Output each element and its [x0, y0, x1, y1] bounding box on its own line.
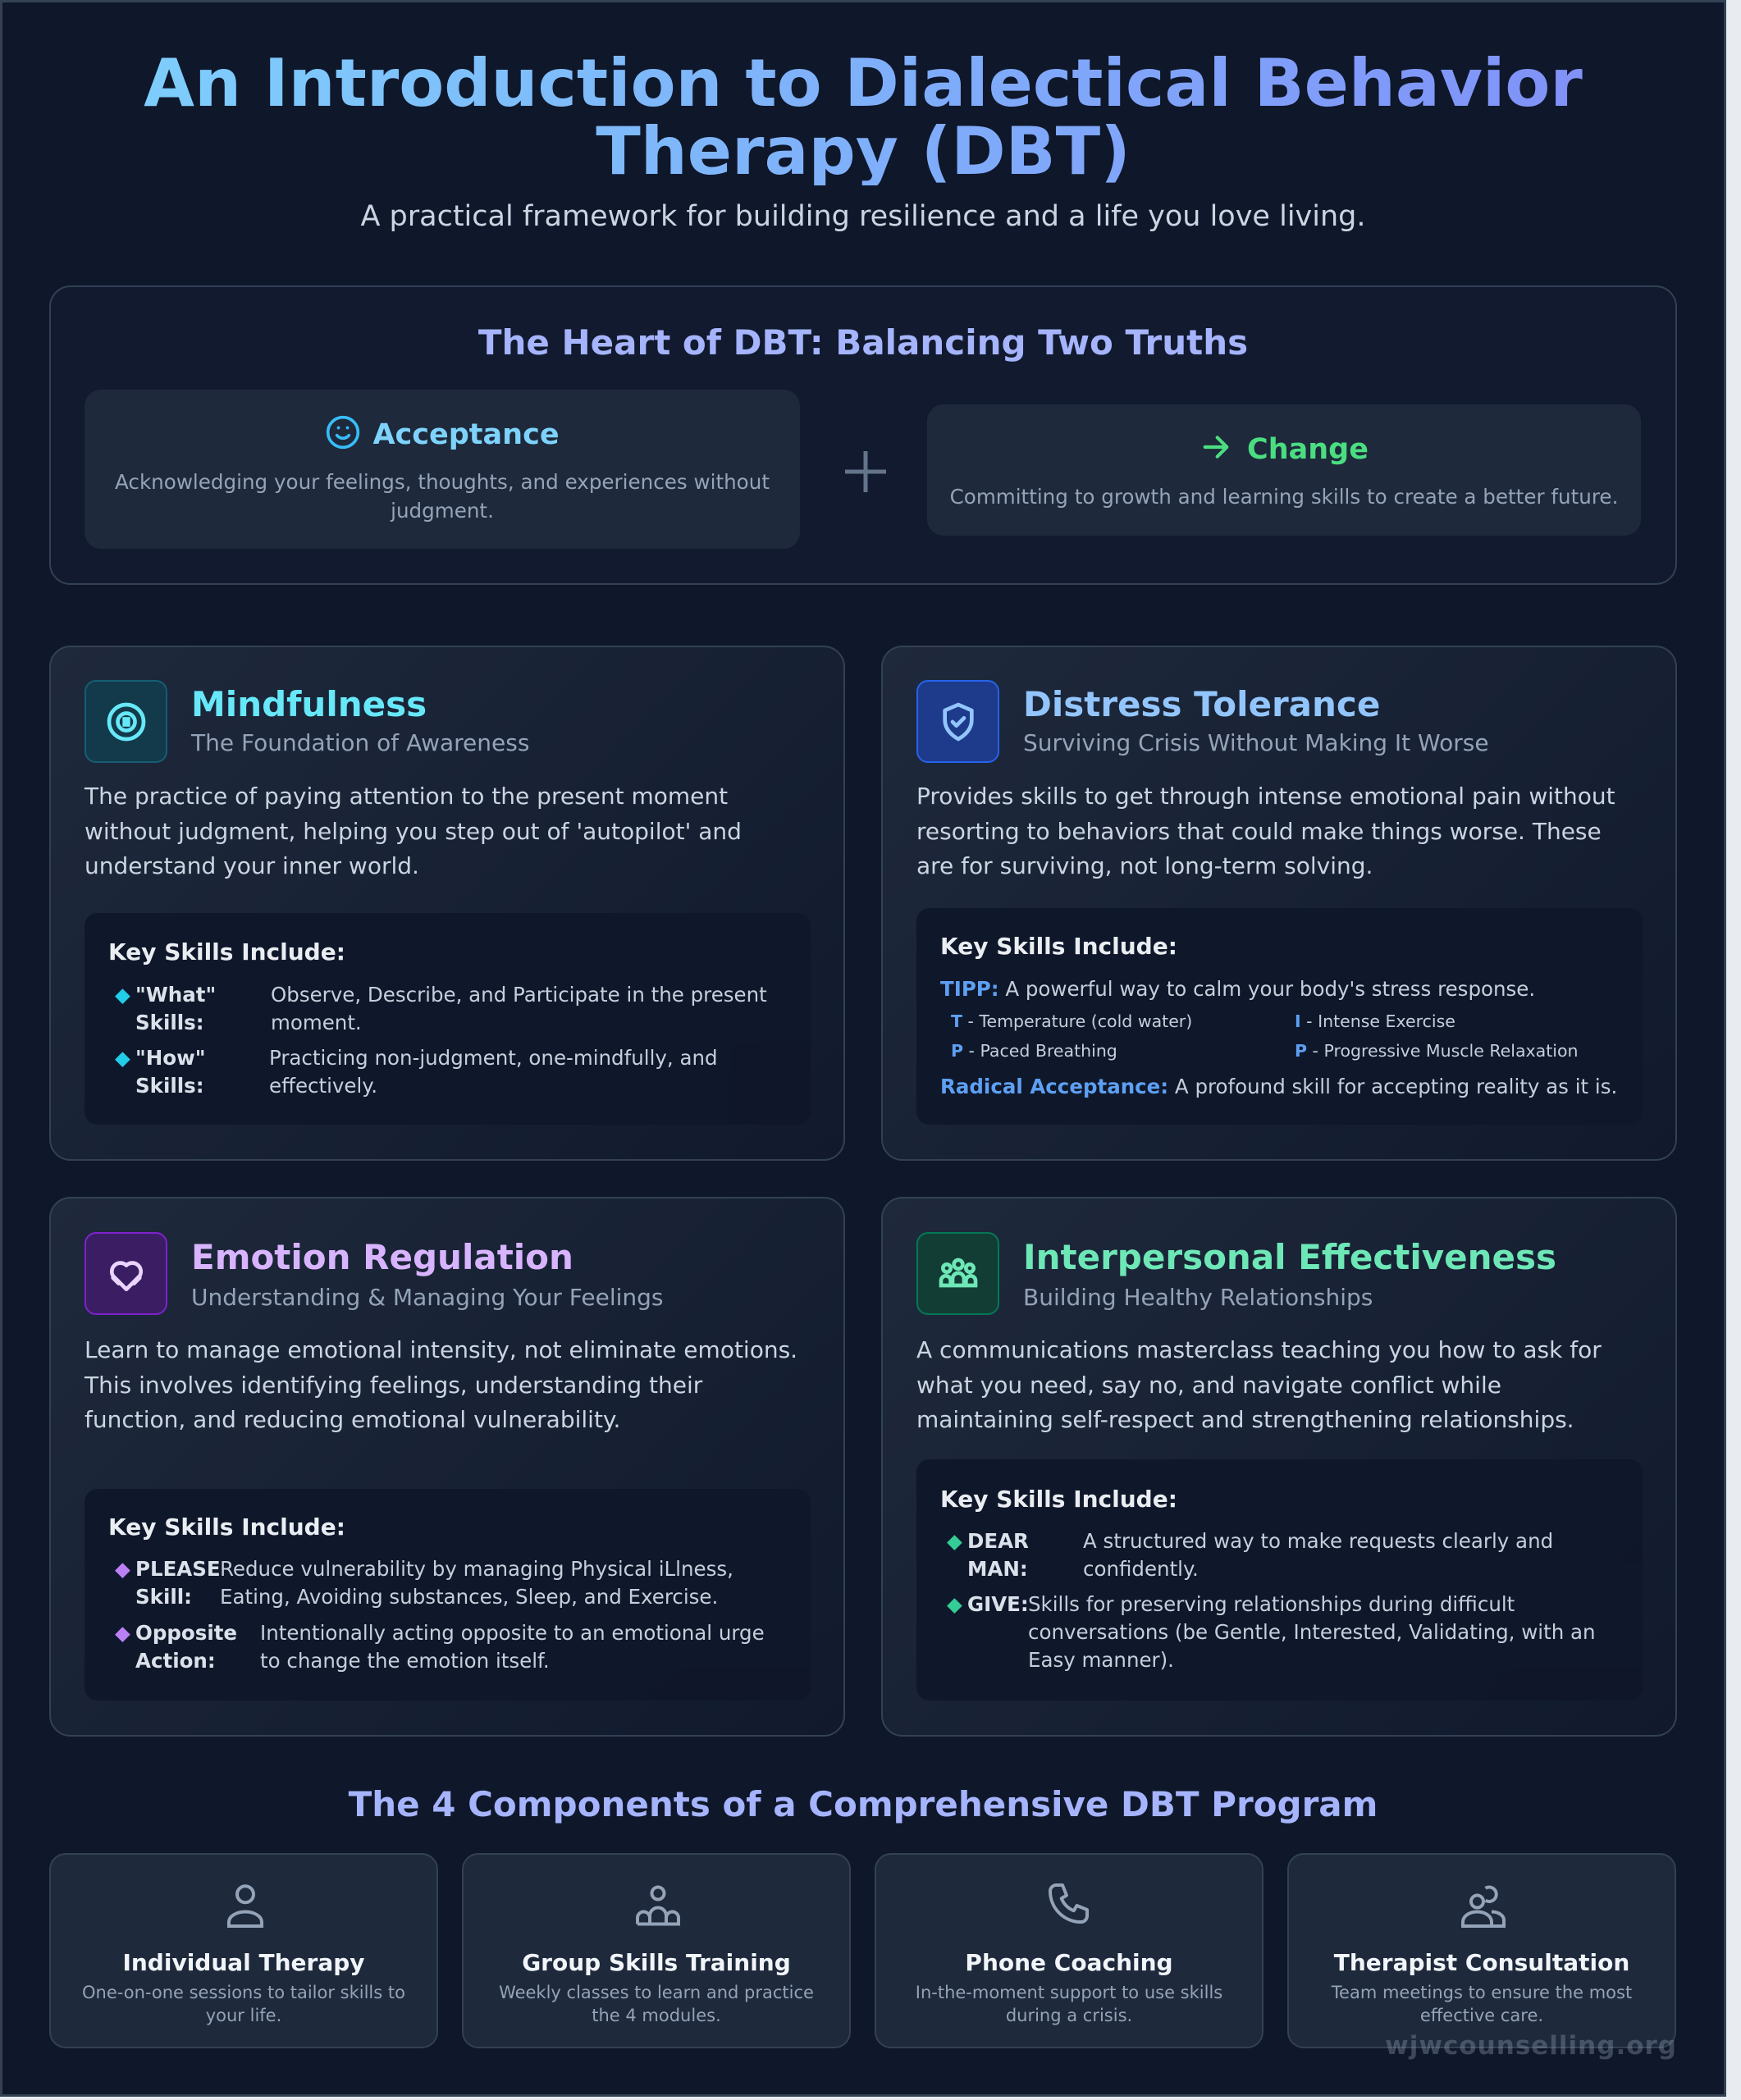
card: group skills training: Group Skills Training	[522, 1949, 791, 1976]
skill: GIVE: Easy manner).	[1028, 1648, 1174, 1672]
title: Therapy (DBT)	[596, 113, 1131, 189]
skill: DEAR MAN	[947, 1529, 1553, 1581]
body text	[916, 783, 1615, 879]
change title with arrow: Change	[1247, 433, 1369, 466]
skill: DEAR MAN: MAN:	[967, 1557, 1028, 1581]
acceptance title with icon: Acceptance	[372, 418, 560, 451]
icon: plus	[845, 451, 886, 492]
skill: how: "How"	[135, 1046, 205, 1070]
acceptance description: Acknowledging your feelings, thoughts, and experiences without	[115, 470, 770, 494]
card: phone coaching: during a crisis.	[1006, 2006, 1132, 2025]
card: phone coaching: Phone Coaching	[965, 1949, 1173, 1976]
card: therapist consultation: effective care.	[1420, 2006, 1543, 2025]
skill: opposite action: Opposite	[135, 1621, 237, 1645]
TIPP items: T - Temperature (cold water)	[951, 1011, 1192, 1031]
icon: group	[636, 1885, 680, 1926]
icon: mindfulness	[85, 680, 167, 763]
card: therapist consultation	[1287, 1853, 1676, 2048]
heading: Interpersonal Effectiveness	[1023, 1237, 1556, 1277]
card: group skills training: Weekly classes to learn and practice	[499, 1983, 814, 2002]
skill: GIVE: GIVE:	[967, 1592, 1029, 1616]
key skills box: P - Paced Breathing	[951, 1041, 1117, 1061]
heading: Emotion Regulation	[191, 1237, 573, 1277]
heading: 4 components: The 4 Components of a Comprehensive DBT Program	[349, 1784, 1378, 1824]
card: individual therapy: your life.	[206, 2006, 281, 2025]
body text: This involves identifying feelings, understanding their	[85, 1372, 702, 1398]
card: group skills training: the 4 modules.	[592, 2006, 721, 2025]
card: phone coaching: In-the-moment support to use skills	[916, 1983, 1222, 2002]
watermark: wjwcounselling.org	[1385, 2031, 1677, 2061]
body text: Learn to manage emotional intensity, not eliminate emotions.	[85, 1336, 797, 1363]
subtitle: Understanding & Managing Your Feelings	[191, 1284, 663, 1311]
body text: A communications masterclass teaching you how to ask for	[916, 1336, 1602, 1363]
skill: DEAR MAN: ◆	[947, 1529, 962, 1553]
card: individual therapy	[49, 1853, 438, 2048]
panel: distress tolerance	[881, 646, 1677, 1161]
subtitle: A practical framework for building resilience and a life you love living.	[360, 200, 1366, 233]
skill: what: Observe, Describe, and Participate in the present	[271, 983, 767, 1007]
icon: person	[227, 1884, 263, 1928]
skill: what: Skills:	[135, 1011, 204, 1034]
icon: consultation	[1461, 1885, 1506, 1928]
panel: interpersonal effectiveness	[881, 1197, 1677, 1737]
body text: understand your inner world.	[85, 852, 419, 879]
key skills box	[916, 1459, 1643, 1701]
key skills box: Key Skills Include:	[108, 938, 345, 966]
body text: resorting to behaviors that could make things worse. These	[916, 817, 1602, 845]
icon: heart	[85, 1232, 167, 1315]
skill: PLEASE: Eating, Avoiding substances, Sleep, and Exercise.	[220, 1585, 718, 1609]
subtitle: Surviving Crisis Without Making It Worse	[1023, 729, 1489, 756]
skill: what	[115, 983, 767, 1034]
card: therapist consultation: Team meetings to ensure the most	[1332, 1983, 1632, 2002]
skill: opposite action: ◆	[115, 1621, 130, 1645]
skill: GIVE	[947, 1592, 1596, 1672]
key skills box	[85, 913, 811, 1125]
change description: Committing to growth and learning skills to create a better future.	[950, 485, 1618, 509]
icon: shield	[916, 680, 999, 763]
TIPP: TIPP: A powerful way to calm your body's stress response.	[940, 977, 1535, 1001]
card: individual therapy: Individual Therapy	[122, 1949, 365, 1976]
skill: what: "What"	[135, 983, 216, 1007]
card: phone coaching	[875, 1853, 1263, 2048]
skill: PLEASE: PLEASE	[135, 1557, 221, 1581]
skill: DEAR MAN: A structured way to make requests clearly and	[1083, 1529, 1553, 1553]
body text	[84, 783, 742, 879]
skill: opposite action: to change the emotion itself.	[260, 1649, 550, 1673]
skill: what: ◆	[115, 983, 130, 1007]
heading: Mindfulness	[191, 684, 427, 724]
skill: GIVE: ◆	[947, 1592, 962, 1616]
key skills box: Key Skills Include:	[940, 1486, 1177, 1513]
title	[0, 49, 1726, 185]
skill: PLEASE: Reduce vulnerability by managing Physical iLlness,	[220, 1557, 733, 1581]
body text: maintaining self-respect and strengthening relationships.	[916, 1406, 1574, 1433]
subtitle: The Foundation of Awareness	[191, 729, 529, 756]
skill: opposite action: Action:	[135, 1649, 216, 1673]
icon: people	[916, 1232, 999, 1315]
skill: how: Practicing non-judgment, one-mindfully, and	[269, 1046, 718, 1070]
key skills box: I - Intense Exercise	[1295, 1011, 1455, 1031]
key skills box: P - Progressive Muscle Relaxation	[1295, 1041, 1579, 1061]
key skills box	[916, 908, 1643, 1125]
body text	[84, 1336, 797, 1433]
title: An Introduction to Dialectical Behavior	[144, 45, 1583, 121]
icon: phone	[1049, 1883, 1089, 1924]
skill: how: Skills:	[135, 1074, 204, 1098]
acceptance description	[115, 470, 770, 523]
card: group skills training	[462, 1853, 851, 2048]
skill: PLEASE: ◆	[115, 1557, 130, 1581]
key skills box	[85, 1489, 811, 1701]
acceptance description: judgment.	[391, 499, 494, 523]
subtitle: Building Healthy Relationships	[1023, 1284, 1373, 1311]
key skills box: Key Skills Include:	[940, 933, 1177, 960]
panel: emotion regulation	[49, 1197, 845, 1737]
body text: what you need, say no, and navigate conflict while	[916, 1372, 1501, 1398]
panel: mindfulness	[49, 646, 845, 1161]
panel: heart of DBT	[49, 285, 1677, 585]
box: acceptance	[85, 390, 800, 549]
skill: how: effectively.	[269, 1074, 377, 1098]
heading: Distress Tolerance	[1023, 684, 1380, 724]
skill: GIVE: conversations (be Gentle, Interested, Validating, with an	[1028, 1620, 1596, 1644]
body text: Provides skills to get through intense emotional pain without	[916, 783, 1615, 810]
body text	[916, 1336, 1602, 1433]
card: therapist consultation: Therapist Consultation	[1334, 1949, 1629, 1976]
body text: without judgment, helping you step out of 'autopilot' and	[85, 817, 742, 845]
body text: function, and reducing emotional vulnerability.	[85, 1406, 620, 1433]
body text: are for surviving, not long-term solving.	[916, 852, 1373, 879]
radical acceptance: Radical Acceptance: A profound skill for accepting reality as it is.	[940, 1075, 1617, 1098]
key skills box: Key Skills Include:	[108, 1513, 345, 1541]
skill: DEAR MAN: DEAR	[967, 1529, 1029, 1553]
skill: DEAR MAN: confidently.	[1083, 1557, 1199, 1581]
skill: opposite action	[115, 1621, 765, 1673]
heading: balancing two truths: The Heart of DBT: Balancing Two Truths	[478, 322, 1248, 363]
skill: GIVE: Skills for preserving relationships during difficult	[1028, 1592, 1515, 1616]
skill: what: moment.	[271, 1011, 362, 1034]
body text: The practice of paying attention to the present moment	[85, 783, 728, 810]
skill: PLEASE: Skill:	[135, 1585, 192, 1609]
skill: opposite action: Intentionally acting opposite to an emotional urge	[260, 1621, 765, 1645]
skill: how: ◆	[115, 1046, 130, 1070]
box: change	[927, 404, 1641, 536]
card: individual therapy: One-on-one sessions to tailor skills to	[82, 1983, 405, 2002]
skill: how	[115, 1046, 718, 1098]
skill: PLEASE	[115, 1557, 733, 1609]
